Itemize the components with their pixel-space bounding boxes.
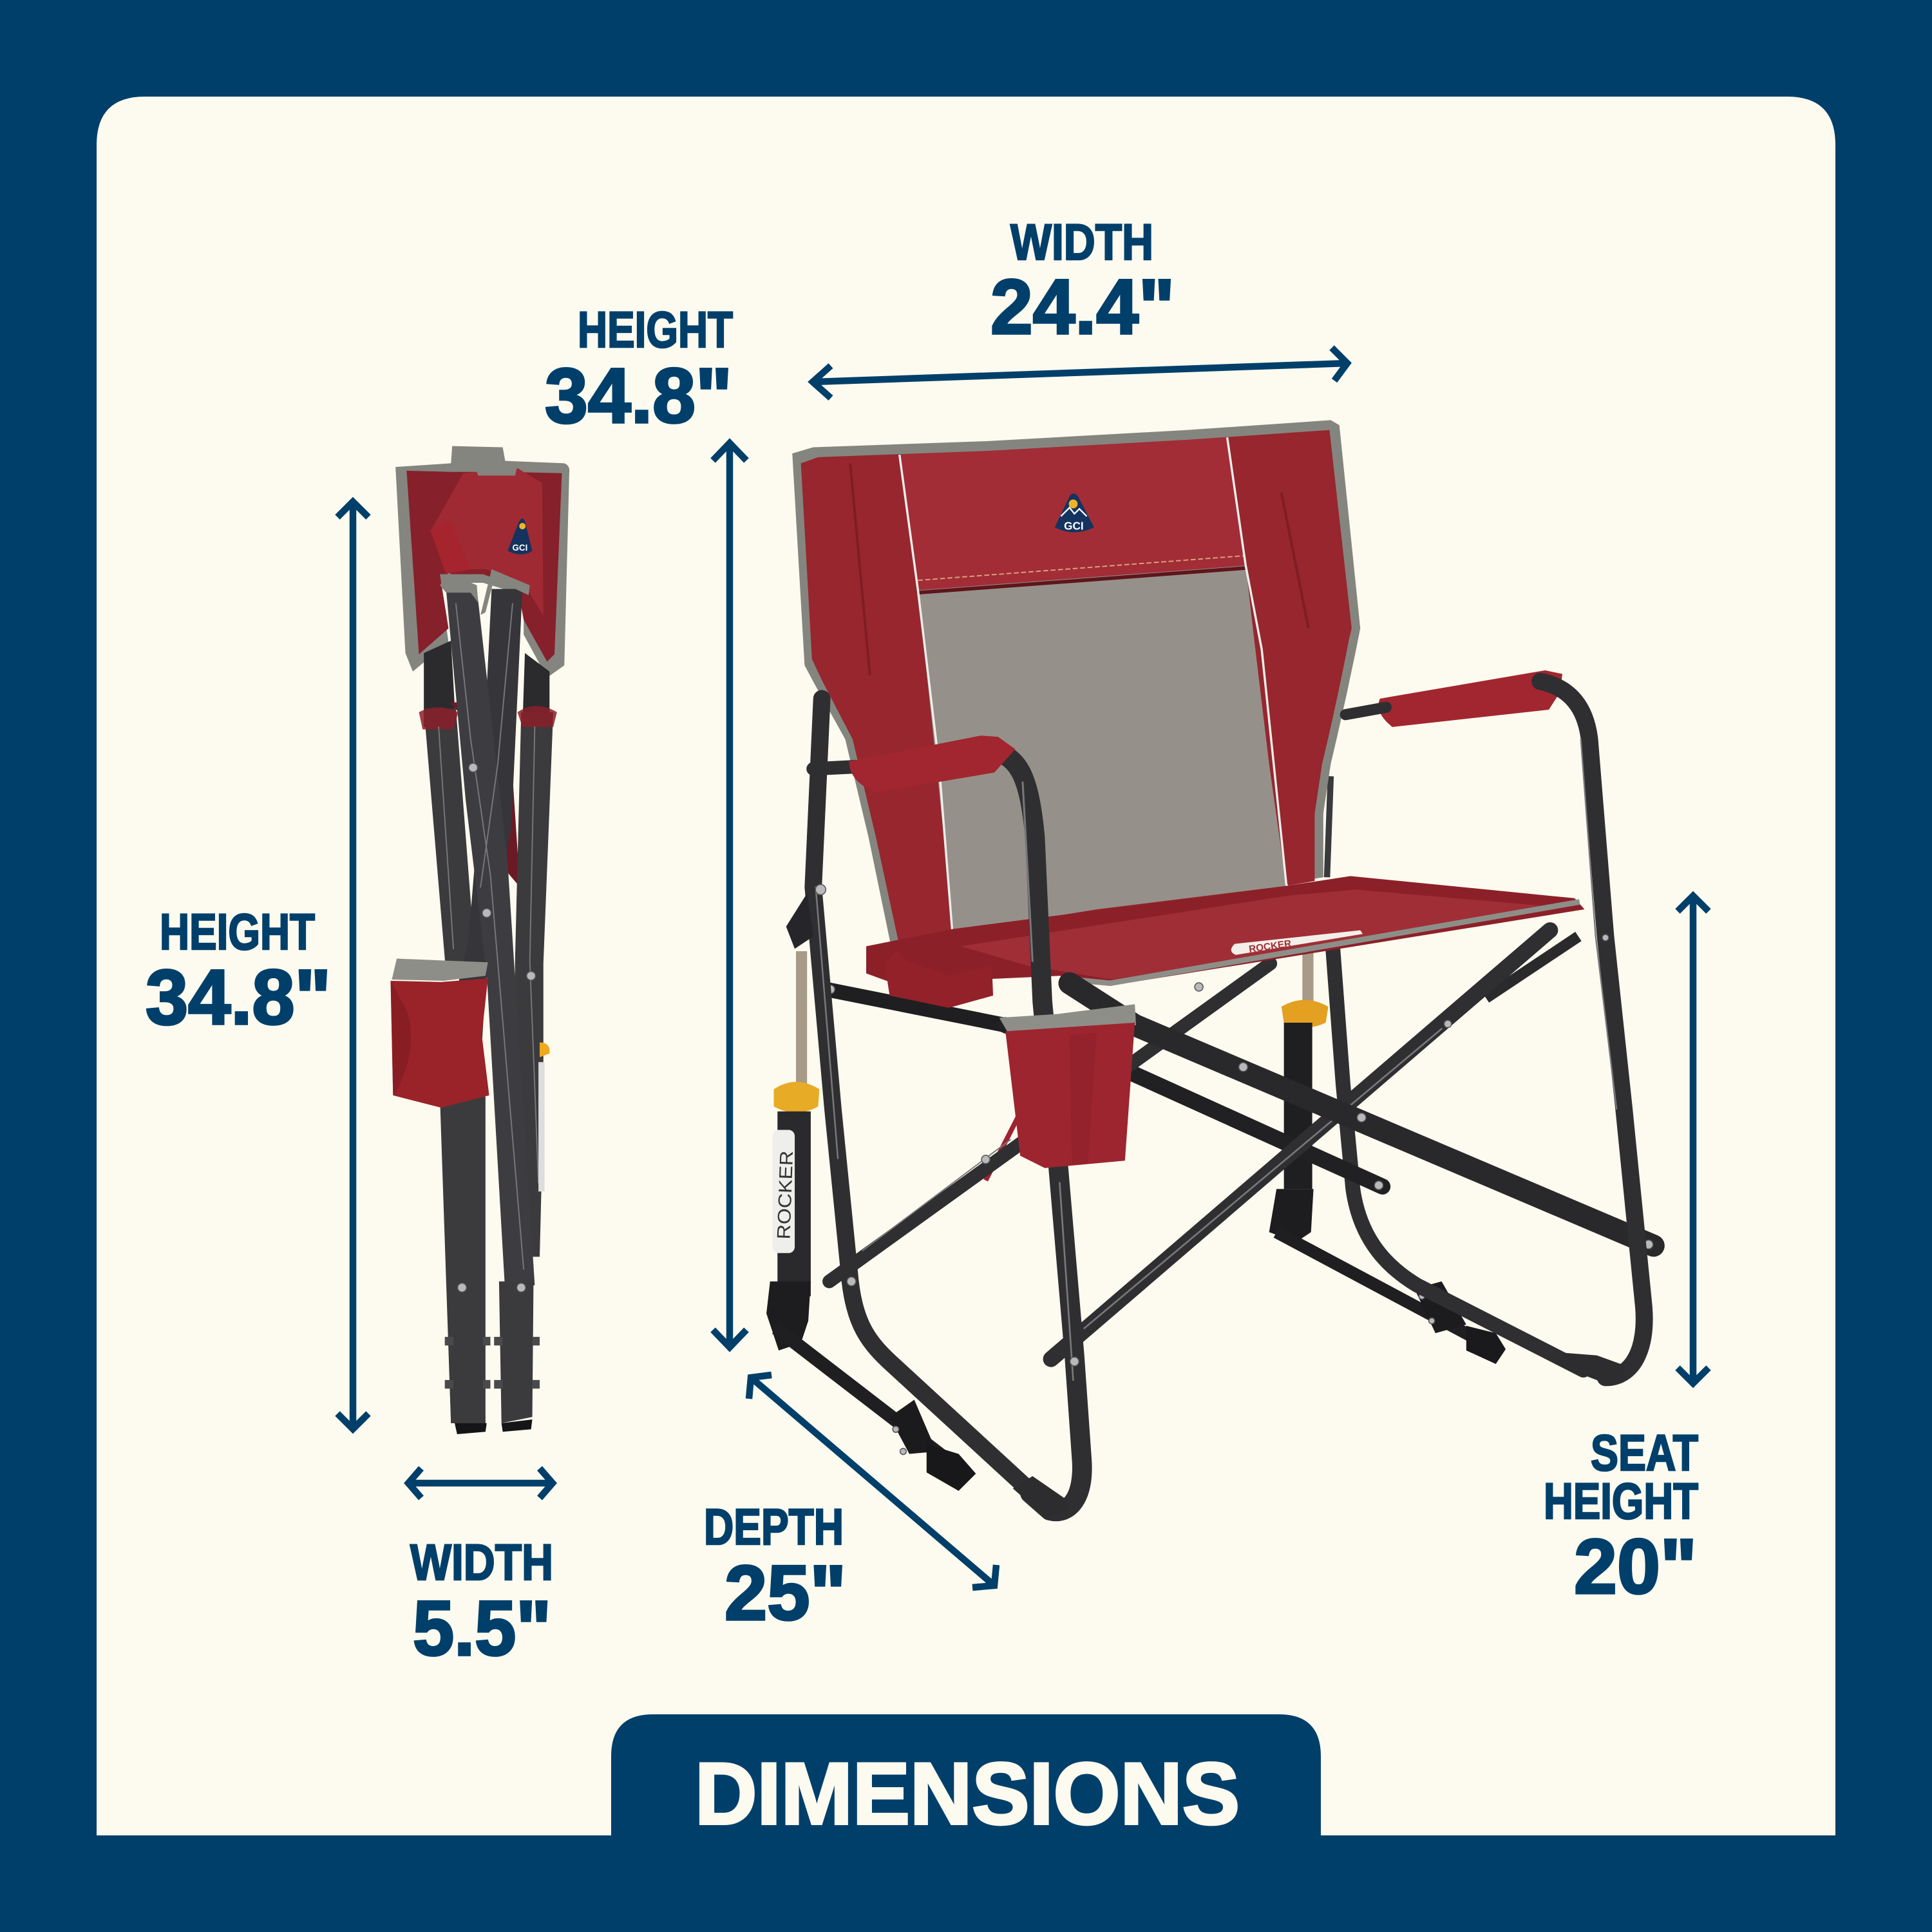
right tube and arm <box>1540 681 1644 1383</box>
dimension label: seat height: SEAT <box>1591 1424 1698 1481</box>
seat Rocker logo: ROCKER <box>1248 938 1292 955</box>
rear right tube <box>1332 936 1584 1370</box>
front cup holder <box>999 1004 1136 1168</box>
seat <box>866 876 1584 986</box>
dimension label: chair height: HEIGHT <box>578 301 733 358</box>
dimension label: folded height: 34.8" <box>146 953 331 1041</box>
folds and shading <box>850 463 1309 675</box>
main chair illustration <box>766 420 1654 1517</box>
cross tube behind arm <box>813 766 862 769</box>
dimension label: folded width <box>410 1533 553 1672</box>
dimension label: depth: DEPTH <box>704 1498 844 1555</box>
seat Rocker logo <box>1231 931 1363 955</box>
dimension label: chair height: 34.8" <box>545 352 732 439</box>
long diagonal strut <box>1051 931 1550 1359</box>
title tab <box>611 1714 1321 1842</box>
dimension label: folded height: HEIGHT <box>160 903 315 960</box>
rear diagonal strut <box>829 963 1271 1285</box>
left tube <box>786 699 1030 1491</box>
dimension label: folded width: 5.5" <box>413 1584 551 1672</box>
folded chair: metal frame <box>419 569 557 1434</box>
folded chair: backrest fabric <box>395 446 569 677</box>
dimension label: folded height <box>146 903 331 1041</box>
dimension label: seat height: HEIGHT <box>1544 1472 1698 1530</box>
right rocker base <box>1276 1232 1506 1364</box>
dimension label: chair width: 24.4" <box>990 263 1175 350</box>
stitching <box>918 556 1244 580</box>
small rear bracket <box>1486 936 1578 998</box>
mesh panel <box>918 565 1286 933</box>
GCI logo on backrest <box>1055 493 1094 533</box>
arrow: chair width <box>813 348 1347 398</box>
title tab: DIMENSIONS <box>695 1745 1240 1842</box>
front leg <box>986 749 1082 1517</box>
backrest rear tube <box>1327 776 1331 877</box>
mesh top seam <box>918 568 1245 592</box>
white piping <box>900 437 1461 949</box>
shock ROCKER label <box>773 1130 797 1253</box>
folded chair: GCI logo <box>507 518 533 554</box>
front seat pocket <box>885 951 993 1008</box>
arrow: folded height <box>337 502 368 1429</box>
rear armrest pad <box>1378 670 1562 727</box>
backrest fabric <box>801 430 1352 946</box>
folded chair illustration <box>395 446 569 677</box>
dimension label: chair width: WIDTH <box>1010 213 1153 270</box>
dimension label: depth: 25" <box>724 1549 846 1636</box>
dimension label: folded width: WIDTH <box>410 1533 553 1591</box>
backrest centre panel <box>901 437 1245 590</box>
wide cross bar <box>1070 983 1654 1249</box>
backrest border <box>792 420 1360 951</box>
left rocker base <box>776 1329 976 1491</box>
GCI logo on backrest: GCI <box>1064 520 1084 533</box>
dimension label: seat height: 20" <box>1574 1522 1697 1610</box>
folded chair: cup holder <box>391 959 489 1108</box>
dimension label: depth <box>704 1498 846 1636</box>
folded chair: GCI logo: GCI <box>513 543 527 553</box>
arrow: chair height <box>713 443 746 1347</box>
fabric strip behind rear strut <box>986 1113 1020 1180</box>
shock ROCKER label: ROCKER <box>773 1150 797 1240</box>
dimension label: chair height <box>545 301 733 439</box>
dimension label: chair width <box>990 213 1175 350</box>
front armrest pad <box>849 735 1016 792</box>
left shock absorber <box>766 951 819 1350</box>
arrow: folded width <box>408 1468 553 1498</box>
dimension label: seat height <box>1544 1424 1698 1610</box>
arrow: seat height <box>1678 896 1709 1383</box>
arrow: depth <box>749 1375 996 1587</box>
lower cross bar <box>826 985 1383 1189</box>
right shock absorber <box>1269 949 1329 1242</box>
